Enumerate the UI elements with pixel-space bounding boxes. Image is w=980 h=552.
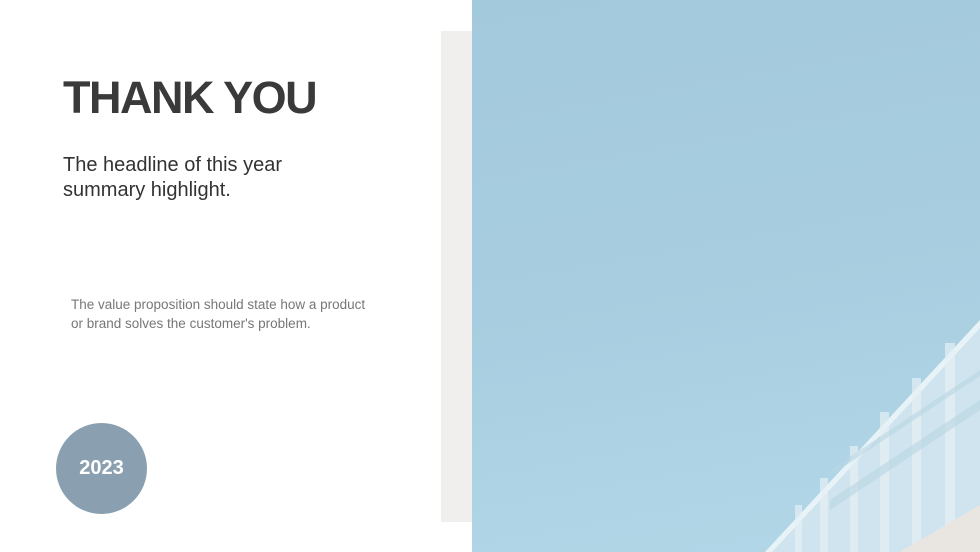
body text: The value proposition should state how a product [71, 297, 365, 312]
photo: sky and building [472, 0, 980, 552]
headline: The headline of this year [63, 154, 282, 176]
headline [63, 154, 282, 201]
headline: summary highlight. [63, 179, 231, 201]
body text: or brand solves the customer's problem. [71, 316, 311, 331]
year badge: 2023 [79, 457, 124, 479]
body text [71, 297, 365, 331]
title: THANK YOU [63, 72, 316, 123]
backdrop panel [441, 31, 481, 522]
year badge [56, 423, 147, 514]
